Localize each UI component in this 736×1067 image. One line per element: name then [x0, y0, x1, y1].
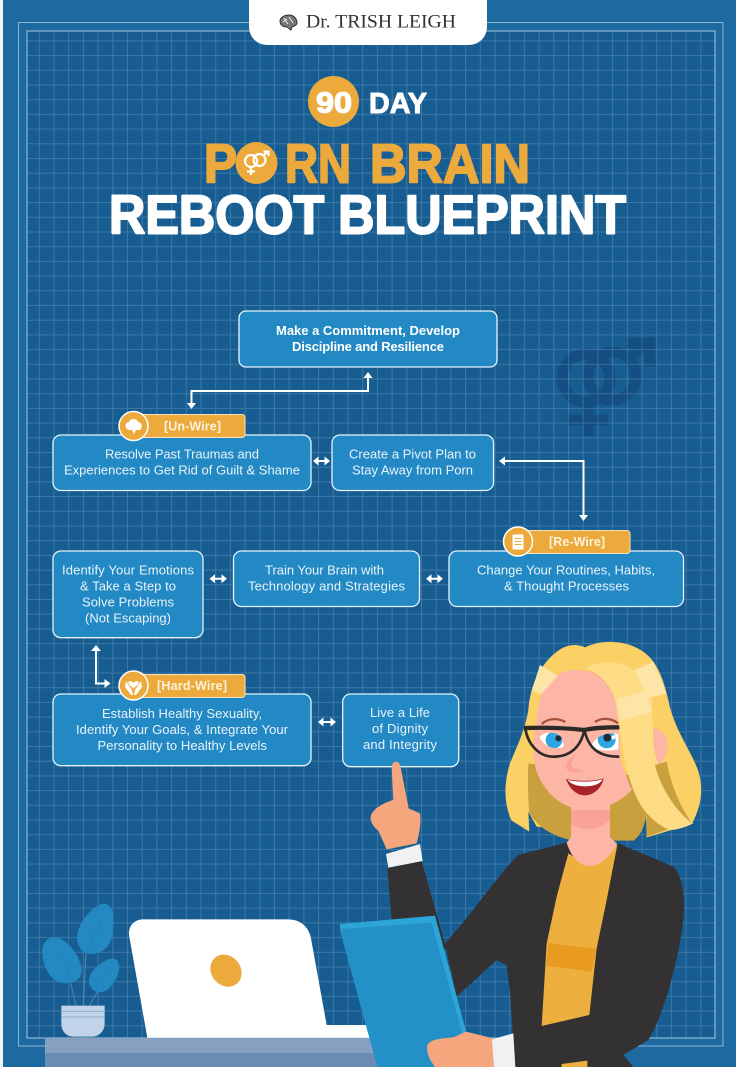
step: resolve past traumas [53, 435, 311, 490]
face [534, 670, 632, 810]
hair highlights [532, 662, 667, 721]
icon: cloud with bolt [126, 419, 142, 434]
step: pivot plan: Stay Away from Porn [352, 462, 473, 478]
arrow: train to change [426, 574, 443, 583]
title block [109, 76, 626, 246]
illustrated woman [340, 642, 701, 1067]
heading: porn brain: BRAIN [370, 132, 530, 194]
cuff: lower [492, 1033, 515, 1067]
step: healthy sexuality [53, 694, 311, 766]
icon: gender symbols in O [236, 142, 278, 184]
desk [45, 1038, 385, 1067]
step: healthy sexuality: Establish Healthy Sexuality, [102, 706, 262, 721]
arrow: identify to hard-wire [91, 645, 110, 688]
step: make a commitment: Make a Commitment, Develop [276, 323, 460, 338]
step: train your brain: Train Your Brain with [265, 562, 384, 578]
neck [567, 807, 617, 866]
step: resolve past traumas: Experiences to Get Rid of Guilt & Shame [64, 462, 300, 478]
step: identify emotions: (Not Escaping) [85, 610, 171, 626]
heading: reboot blueprint: REBOOT BLUEPRINT [109, 184, 626, 246]
hand: pointing [371, 762, 420, 849]
badge: 90 [308, 76, 359, 127]
step: dignity and integrity: and Integrity [363, 737, 438, 752]
label: hard-wire: [Hard-Wire] [157, 679, 227, 693]
label: un-wire [119, 412, 245, 440]
label: re-wire [504, 527, 630, 556]
head [524, 662, 693, 830]
heading: porn brain [204, 132, 530, 194]
step: change routines [449, 551, 684, 606]
step: change routines: Change Your Routines, Habits, [477, 562, 655, 578]
badge: 90: 90 [316, 88, 352, 120]
step: identify emotions: & Take a Step to [80, 578, 176, 594]
step: healthy sexuality: Personality to Healthy Levels [98, 738, 268, 753]
jacket [445, 843, 684, 1067]
eyebrows [542, 719, 618, 724]
watermark: gender symbols [562, 342, 650, 436]
heading: day: DAY [369, 88, 427, 120]
header logo tab [249, 0, 487, 45]
step: healthy sexuality: Identify Your Goals, & Integrate Your [76, 722, 289, 737]
nose [566, 755, 585, 772]
label: re-wire: [Re-Wire] [549, 535, 605, 549]
step: dignity and integrity: Live a Life [370, 705, 430, 720]
step: identify emotions: Solve Problems [82, 594, 174, 610]
step: change routines: & Thought Processes [504, 578, 630, 594]
arrow: identify to train [210, 574, 227, 583]
step: resolve past traumas: Resolve Past Traumas and [105, 446, 259, 462]
cuff: raised [386, 844, 423, 868]
brand name: Dr. TRISH LEIGH [306, 12, 456, 32]
step: make a commitment [239, 311, 497, 367]
heading: porn brain: RN [285, 132, 351, 194]
step: identify emotions [53, 551, 203, 638]
eyes [539, 730, 618, 750]
step: identify emotions: Identify Your Emotions [62, 562, 194, 578]
clipboard [340, 916, 480, 1067]
arrow: resolve to pivot [313, 456, 330, 466]
arrow: sexuality to dignity [318, 718, 336, 726]
flowchart [53, 311, 684, 767]
shirt [542, 845, 617, 1026]
icon: brain [280, 15, 297, 30]
step: make a commitment: Discipline and Resilience [292, 339, 444, 354]
raised arm sleeve [387, 861, 447, 950]
icon: clipboard [512, 534, 524, 550]
icon: hands and heart [125, 681, 142, 695]
plant [42, 904, 119, 1037]
mouth [566, 778, 604, 795]
label: hard-wire [119, 671, 245, 700]
plant and laptop [42, 904, 370, 1038]
step: train your brain [234, 551, 420, 606]
hand: lower [427, 1032, 494, 1067]
arrow: commitment to un-wire [187, 372, 372, 409]
glasses [524, 727, 619, 757]
laptop [129, 919, 370, 1038]
body [340, 762, 684, 1067]
pot [61, 1006, 105, 1037]
hair front lock [585, 662, 693, 830]
arrow: pivot to re-wire [499, 456, 588, 521]
step: pivot plan [332, 435, 494, 490]
heading: porn brain: P [204, 132, 237, 194]
step: dignity and integrity [343, 694, 459, 767]
step: dignity and integrity: of Dignity [372, 721, 428, 736]
label: un-wire: [Un-Wire] [164, 420, 221, 434]
hair back [505, 642, 701, 841]
step: pivot plan: Create a Pivot Plan to [349, 446, 476, 462]
step: train your brain: Technology and Strategies [248, 578, 406, 594]
shirt hem [562, 1061, 587, 1067]
ear [653, 728, 668, 767]
